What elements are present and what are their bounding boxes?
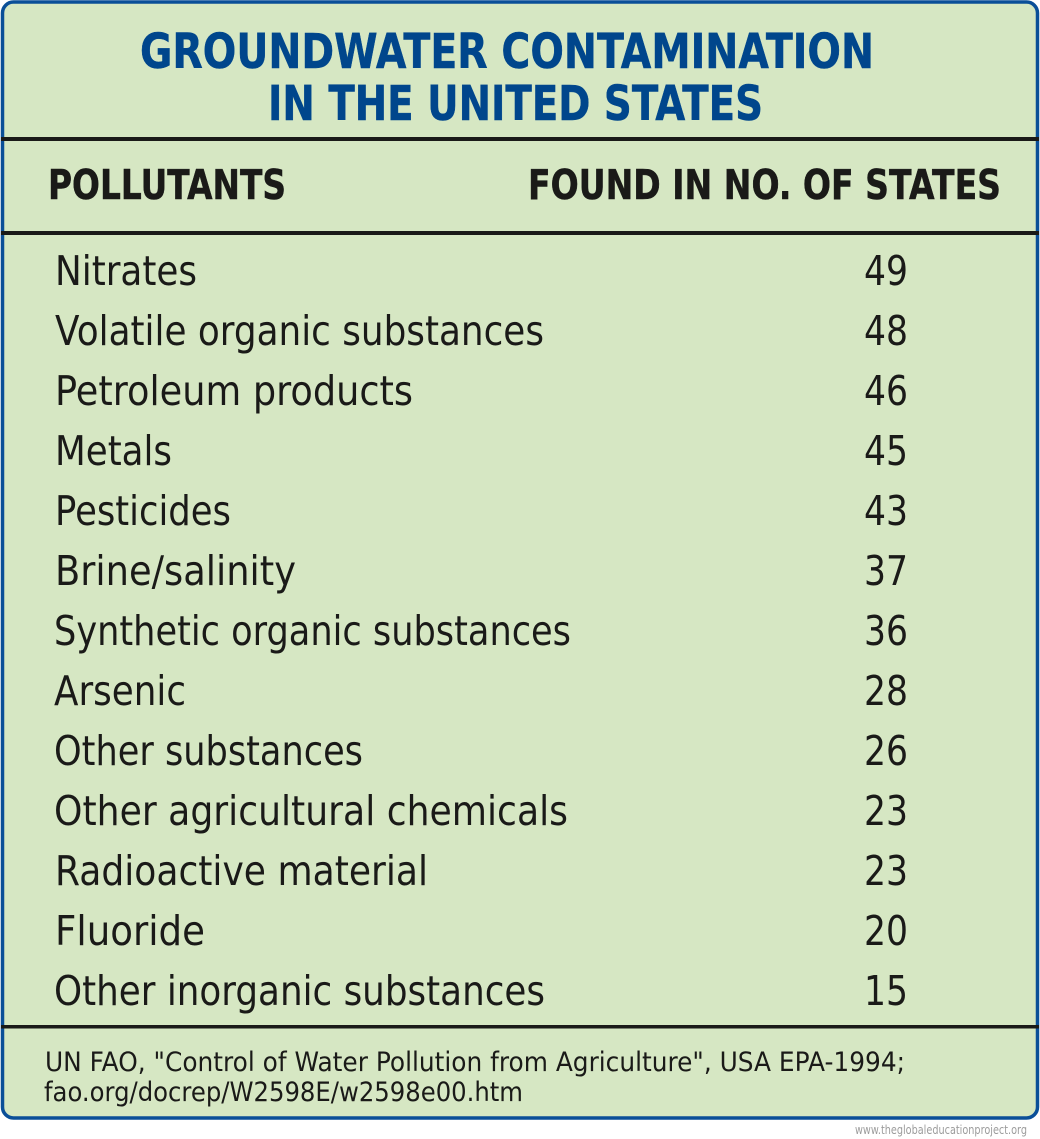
- row: Fluoride: Fluoride: [55, 907, 205, 955]
- row: Other inorganic substances: Other inorganic substances: [54, 967, 545, 1015]
- source note: [44, 1047, 905, 1108]
- table rows: [54, 247, 908, 1015]
- title: GROUNDWATER CONTAMINATION: [140, 24, 874, 80]
- row: Synthetic organic substances: Synthetic organic substances: [54, 607, 571, 655]
- row: Pesticides: 43: [864, 487, 908, 535]
- row: Radioactive material: Radioactive material: [55, 847, 428, 895]
- row: Brine/salinity: [55, 547, 908, 595]
- row: Volatile organic substances: [55, 307, 908, 355]
- row: Petroleum products: [55, 367, 908, 415]
- row: Arsenic: 28: [864, 667, 908, 715]
- row: Metals: 45: [864, 427, 908, 475]
- row: Other inorganic substances: 15: [864, 967, 908, 1015]
- title: IN THE UNITED STATES: [268, 76, 763, 132]
- table column headings: POLLUTANTS: [48, 161, 286, 209]
- row: Fluoride: 20: [864, 907, 908, 955]
- row: Metals: Metals: [55, 427, 172, 475]
- row: Petroleum products: Petroleum products: [55, 367, 413, 415]
- row: Other substances: 26: [864, 727, 908, 775]
- row: Brine/salinity: 37: [864, 547, 908, 595]
- row: Arsenic: [54, 667, 908, 715]
- source rule: [1, 1025, 1039, 1028]
- row: Volatile organic substances: 48: [864, 307, 908, 355]
- row: Other substances: Other substances: [54, 727, 363, 775]
- row: Pesticides: [55, 487, 908, 535]
- row: Other inorganic substances: [54, 967, 908, 1015]
- row: Other agricultural chemicals: 23: [864, 787, 908, 835]
- row: Radioactive material: 23: [864, 847, 908, 895]
- row: Nitrates: [55, 247, 908, 295]
- row: Other substances: [54, 727, 908, 775]
- row: Other agricultural chemicals: [54, 787, 908, 835]
- row: Brine/salinity: Brine/salinity: [55, 547, 296, 595]
- row: Pesticides: Pesticides: [55, 487, 231, 535]
- row: Other agricultural chemicals: Other agricultural chemicals: [54, 787, 568, 835]
- row: Radioactive material: [55, 847, 908, 895]
- row: Fluoride: [55, 907, 908, 955]
- row: Arsenic: Arsenic: [54, 667, 186, 715]
- row: Petroleum products: 46: [864, 367, 908, 415]
- table column headings: [48, 161, 1001, 209]
- row: Synthetic organic substances: 36: [864, 607, 908, 655]
- title: [140, 24, 874, 132]
- source note: UN FAO, "Control of Water Pollution from Agriculture", USA EPA-1994;: [45, 1047, 905, 1078]
- row: Volatile organic substances: Volatile organic substances: [55, 307, 544, 355]
- source note: fao.org/docrep/W2598E/w2598e00.htm: [44, 1077, 523, 1108]
- row: Nitrates: 49: [864, 247, 908, 295]
- table body rule: [1, 231, 1039, 235]
- table header rule: [1, 137, 1039, 141]
- row: Nitrates: Nitrates: [55, 247, 197, 295]
- row: Metals: [55, 427, 908, 475]
